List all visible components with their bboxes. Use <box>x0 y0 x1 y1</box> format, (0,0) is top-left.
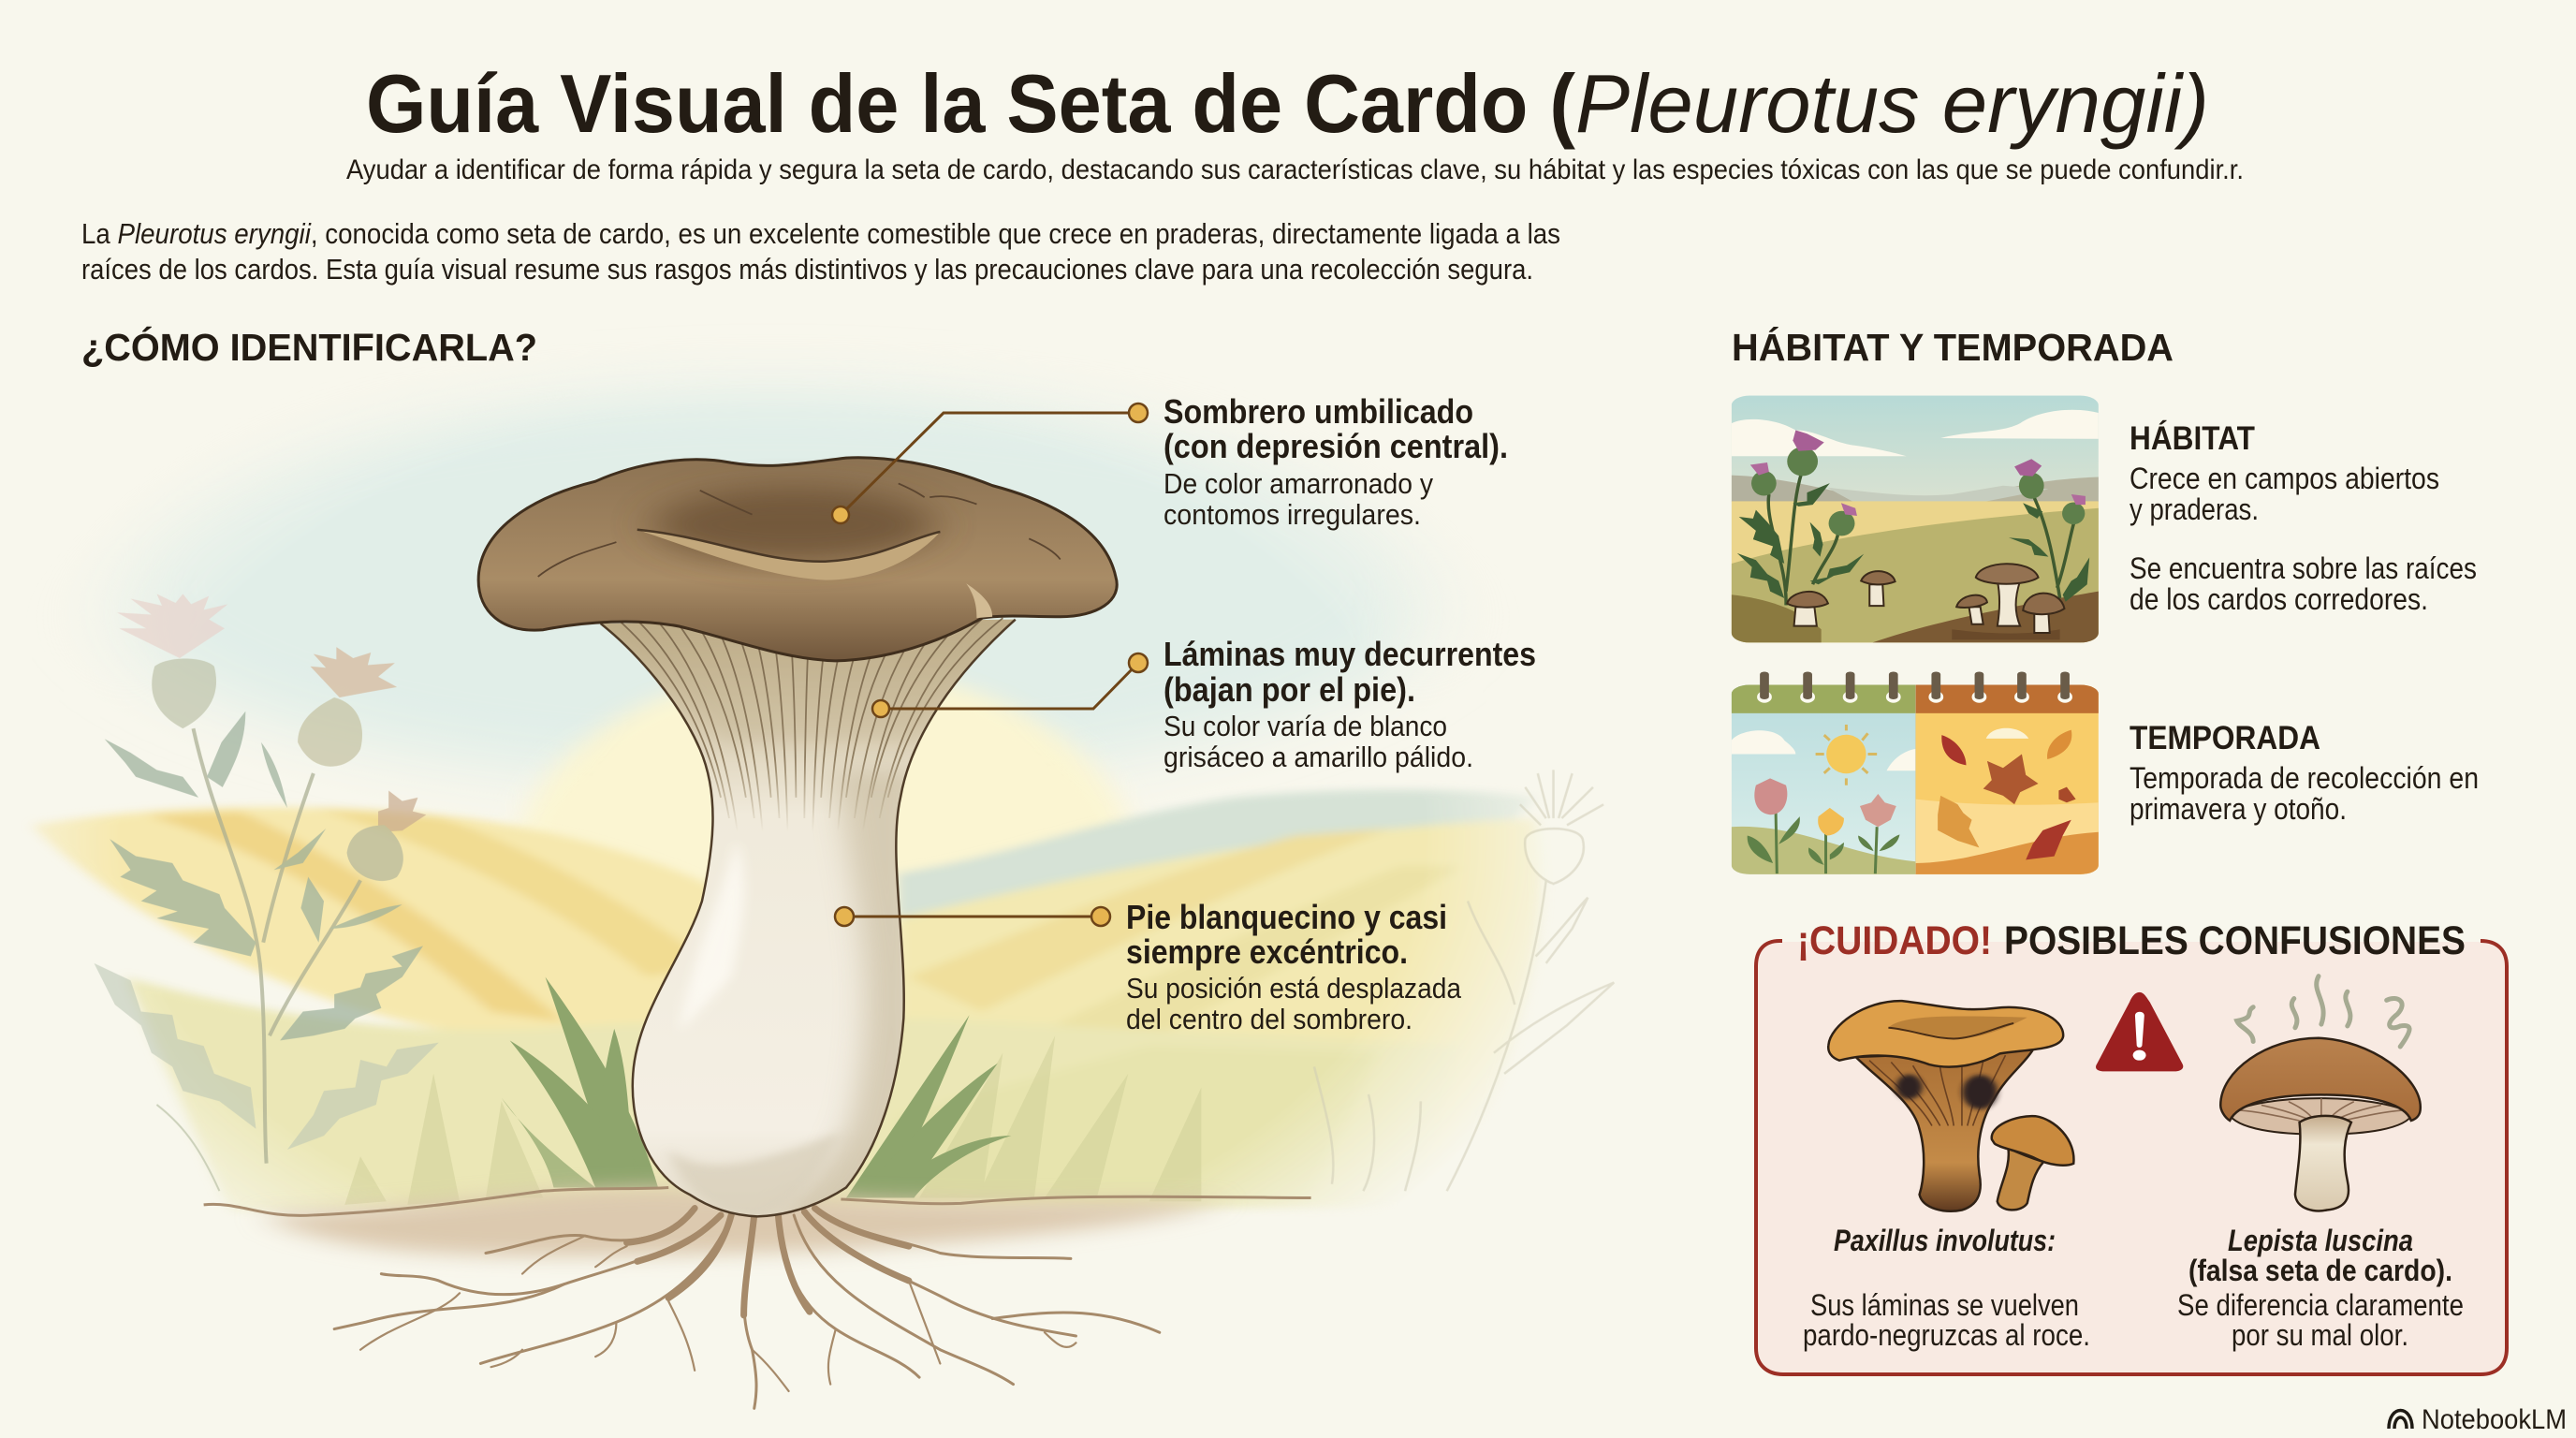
text: lepista <box>2177 1224 2464 1352</box>
illustrations: toxic lookalikes <box>1828 976 2421 1211</box>
callout: sombrero: De color amarronado y <box>1164 467 1433 500</box>
title: Pleurotus eryngii) <box>1575 57 2209 150</box>
intro paragraph: La Pleurotus eryngii, conocida como seta de cardo, es un excelente comestible que crece en praderas, directamente ligada a las <box>81 217 1560 250</box>
callout: sombrero: (con depresión central). <box>1164 427 1508 465</box>
text: habitat: Crece en campos abiertos <box>2130 462 2439 495</box>
callout: pie: Su posición está desplazada <box>1126 972 1462 1005</box>
grass <box>344 977 1201 1205</box>
intro paragraph: raíces de los cardos. Esta guía visual resume sus rasgos más distintivos y las precauciones clave para una recolección segura. <box>81 253 1533 286</box>
callout: laminas: (bajan por el pie). <box>1164 670 1415 709</box>
callout: pie: siempre excéntrico. <box>1126 932 1408 971</box>
intro paragraph <box>81 217 1560 286</box>
mushroom cap <box>478 458 1117 661</box>
callout: sombrero: contomos irregulares. <box>1164 498 1421 531</box>
icon: warning triangle <box>2096 992 2183 1071</box>
landscape backdrop <box>31 383 1542 1211</box>
callout: pie: del centro del sombrero. <box>1126 1003 1412 1035</box>
icon: bad smell wisps <box>2237 976 2409 1047</box>
text: temporada: primavera y otoño. <box>2130 792 2347 826</box>
text: habitat: de los cardos corredores. <box>2130 582 2428 616</box>
text: lepista: Lepista luscina <box>2228 1224 2413 1257</box>
panel heading: ¡CUIDADO! <box>1797 918 1992 963</box>
heading: como identificarla: ¿CÓMO IDENTIFICARLA? <box>81 326 537 369</box>
callout: pie: Pie blanquecino y casi <box>1126 898 1447 936</box>
text: lepista: por su mal olor. <box>2232 1318 2408 1352</box>
thistle right <box>1314 770 1614 1191</box>
text: habitat <box>2130 419 2477 616</box>
text: temporada <box>2130 720 2479 826</box>
gill lines <box>616 618 1003 832</box>
icon: lepista luscina <box>2220 1038 2421 1211</box>
roots <box>334 1209 1160 1408</box>
text: temporada: Temporada de recolección en <box>2130 761 2479 795</box>
text: paxillus <box>1803 1224 2090 1352</box>
title: Guía Visual de la Seta de Cardo ( <box>366 57 1576 150</box>
mushroom stem <box>601 618 1016 1219</box>
panel fill <box>1756 942 2507 1374</box>
illustration: meadow landscape with mushroom <box>31 383 1614 1408</box>
panel border <box>1756 941 2507 1374</box>
panel heading: POSIBLES CONFUSIONES <box>2004 918 2466 963</box>
panel heading <box>1797 918 2466 963</box>
icon: seasonal calendar <box>1732 671 2099 875</box>
subtitle: Ayudar a identificar de forma rápida y segura la seta de cardo, destacando sus características clave, su hábitat y las especies tóxicas con las que se puede confundir.r. <box>346 154 2244 185</box>
text: paxillus: Sus láminas se vuelven <box>1810 1288 2079 1322</box>
callout: laminas <box>872 635 1536 773</box>
heading: habitat y temporada: HÁBITAT Y TEMPORADA <box>1732 326 2174 369</box>
text: habitat: y praderas. <box>2130 492 2259 526</box>
icon: paxillus involutus <box>1828 1001 2073 1211</box>
callout: pie <box>835 898 1462 1035</box>
illustration: habitat scene <box>1732 396 2099 647</box>
callout: sombrero: Sombrero umbilicado <box>1164 392 1473 431</box>
text: temporada: TEMPORADA <box>2130 720 2320 756</box>
callout: laminas: Láminas muy decurrentes <box>1164 635 1536 673</box>
text: paxillus: pardo-negruzcas al roce. <box>1803 1318 2090 1352</box>
callout: laminas: Su color varía de blanco <box>1164 710 1447 742</box>
text: habitat: Se encuentra sobre las raíces <box>2130 551 2477 585</box>
text: paxillus: Paxillus involutus: <box>1834 1224 2056 1257</box>
title <box>366 57 2209 150</box>
soil <box>204 1187 1311 1256</box>
thistles left <box>94 594 439 1191</box>
text: lepista: (falsa seta de cardo). <box>2188 1254 2452 1287</box>
text: habitat: HÁBITAT <box>2130 419 2255 457</box>
panel: posibles confusiones <box>1756 918 2507 1374</box>
text: lepista: Se diferencia claramente <box>2177 1288 2464 1322</box>
callout: laminas: grisáceo a amarillo pálido. <box>1164 741 1473 773</box>
callout: sombrero <box>832 392 1508 531</box>
